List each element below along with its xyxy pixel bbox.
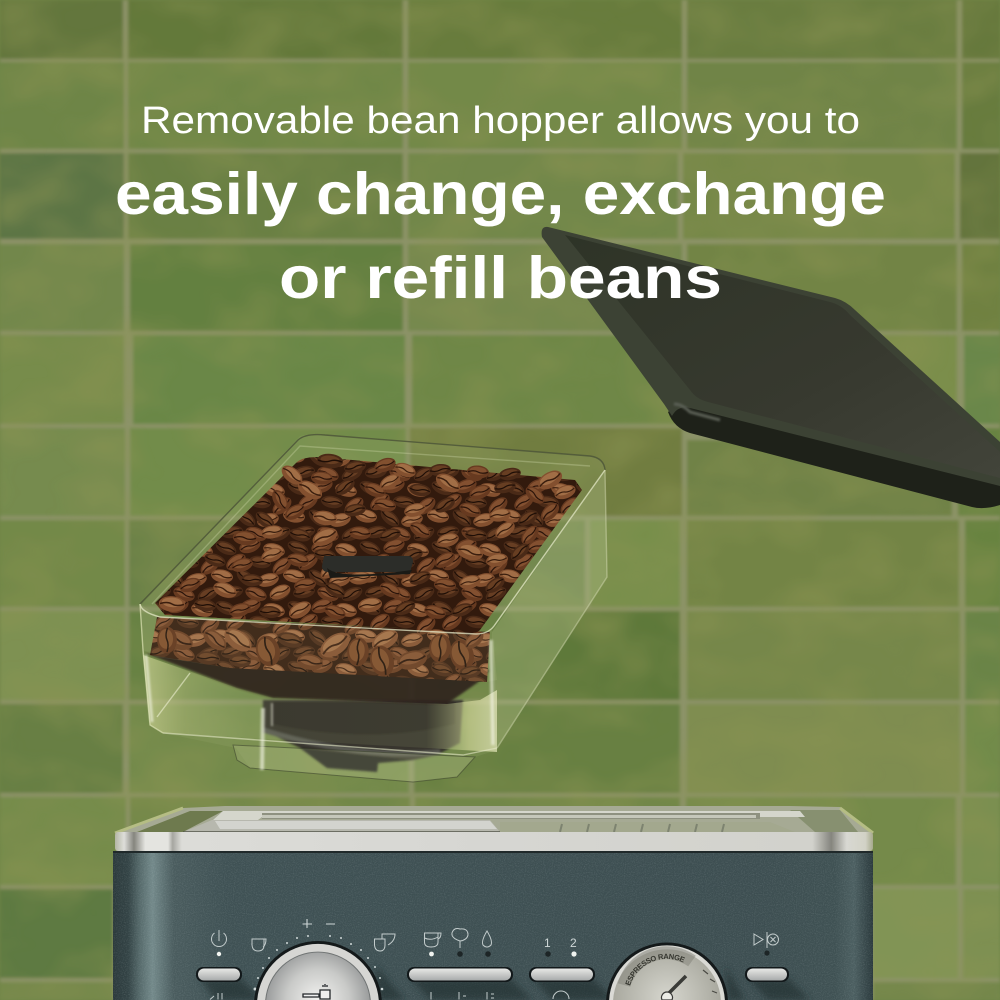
- grinder mechanism: [263, 700, 463, 772]
- drink selection icons: [424, 928, 492, 948]
- cup count labels: 2: [570, 936, 577, 950]
- hopper lower cup glass: [233, 745, 475, 782]
- control panel: [196, 919, 808, 1000]
- machine top tray: [115, 806, 873, 833]
- lid inner panel: [565, 235, 1000, 478]
- gauge label: ESPRESSO RANGE: [625, 954, 685, 986]
- headline intro line: Removable bean hopper allows you to: [141, 100, 860, 142]
- hopper outline rim: [140, 435, 607, 755]
- level lever in beans: [322, 556, 413, 578]
- strength dial scale: [254, 919, 383, 990]
- hopper rim band: [140, 604, 497, 682]
- cup count LEDs: [545, 951, 577, 957]
- drink button: [407, 967, 513, 982]
- cup count labels: [544, 936, 577, 950]
- play LED: [764, 950, 770, 956]
- power icon and LED: [212, 930, 226, 956]
- single cup icon: [252, 939, 266, 951]
- beans visible through front wall: [150, 617, 490, 682]
- chrome band: [115, 832, 873, 851]
- pressure gauge: [606, 942, 728, 1000]
- play and stop icon: [754, 932, 778, 948]
- bean hopper lid: [542, 227, 1000, 508]
- coffee machine: [113, 806, 874, 1000]
- headline bold line two: or refill beans: [279, 245, 722, 311]
- lid lower edge: [668, 312, 1000, 508]
- glass reflection streaks: [146, 640, 493, 770]
- beans top surface: [155, 453, 582, 633]
- hopper back glass: [140, 434, 607, 782]
- lid corner highlight: [674, 404, 720, 420]
- dial portafilter icon: [303, 984, 330, 999]
- bean hopper: [140, 434, 607, 782]
- tray green reflections: [137, 811, 223, 832]
- machine body: [113, 851, 873, 1000]
- power button: [196, 967, 242, 982]
- lid rim: [542, 227, 1000, 486]
- headline bold line one: easily change, exchange: [115, 161, 886, 227]
- cup count labels: 1: [544, 936, 551, 950]
- drink LEDs: [429, 951, 491, 957]
- control shadows: [200, 965, 810, 1000]
- dial: [254, 941, 382, 1000]
- cup count button: [529, 967, 595, 982]
- play button: [745, 967, 789, 982]
- double cup icon: [374, 934, 395, 951]
- funnel underside: [145, 653, 490, 704]
- hopper front glass panel: [143, 655, 497, 752]
- headline: [115, 100, 886, 311]
- lower row icons: [210, 991, 569, 1000]
- tray rails: [213, 811, 805, 820]
- hopper right side face: [492, 470, 607, 747]
